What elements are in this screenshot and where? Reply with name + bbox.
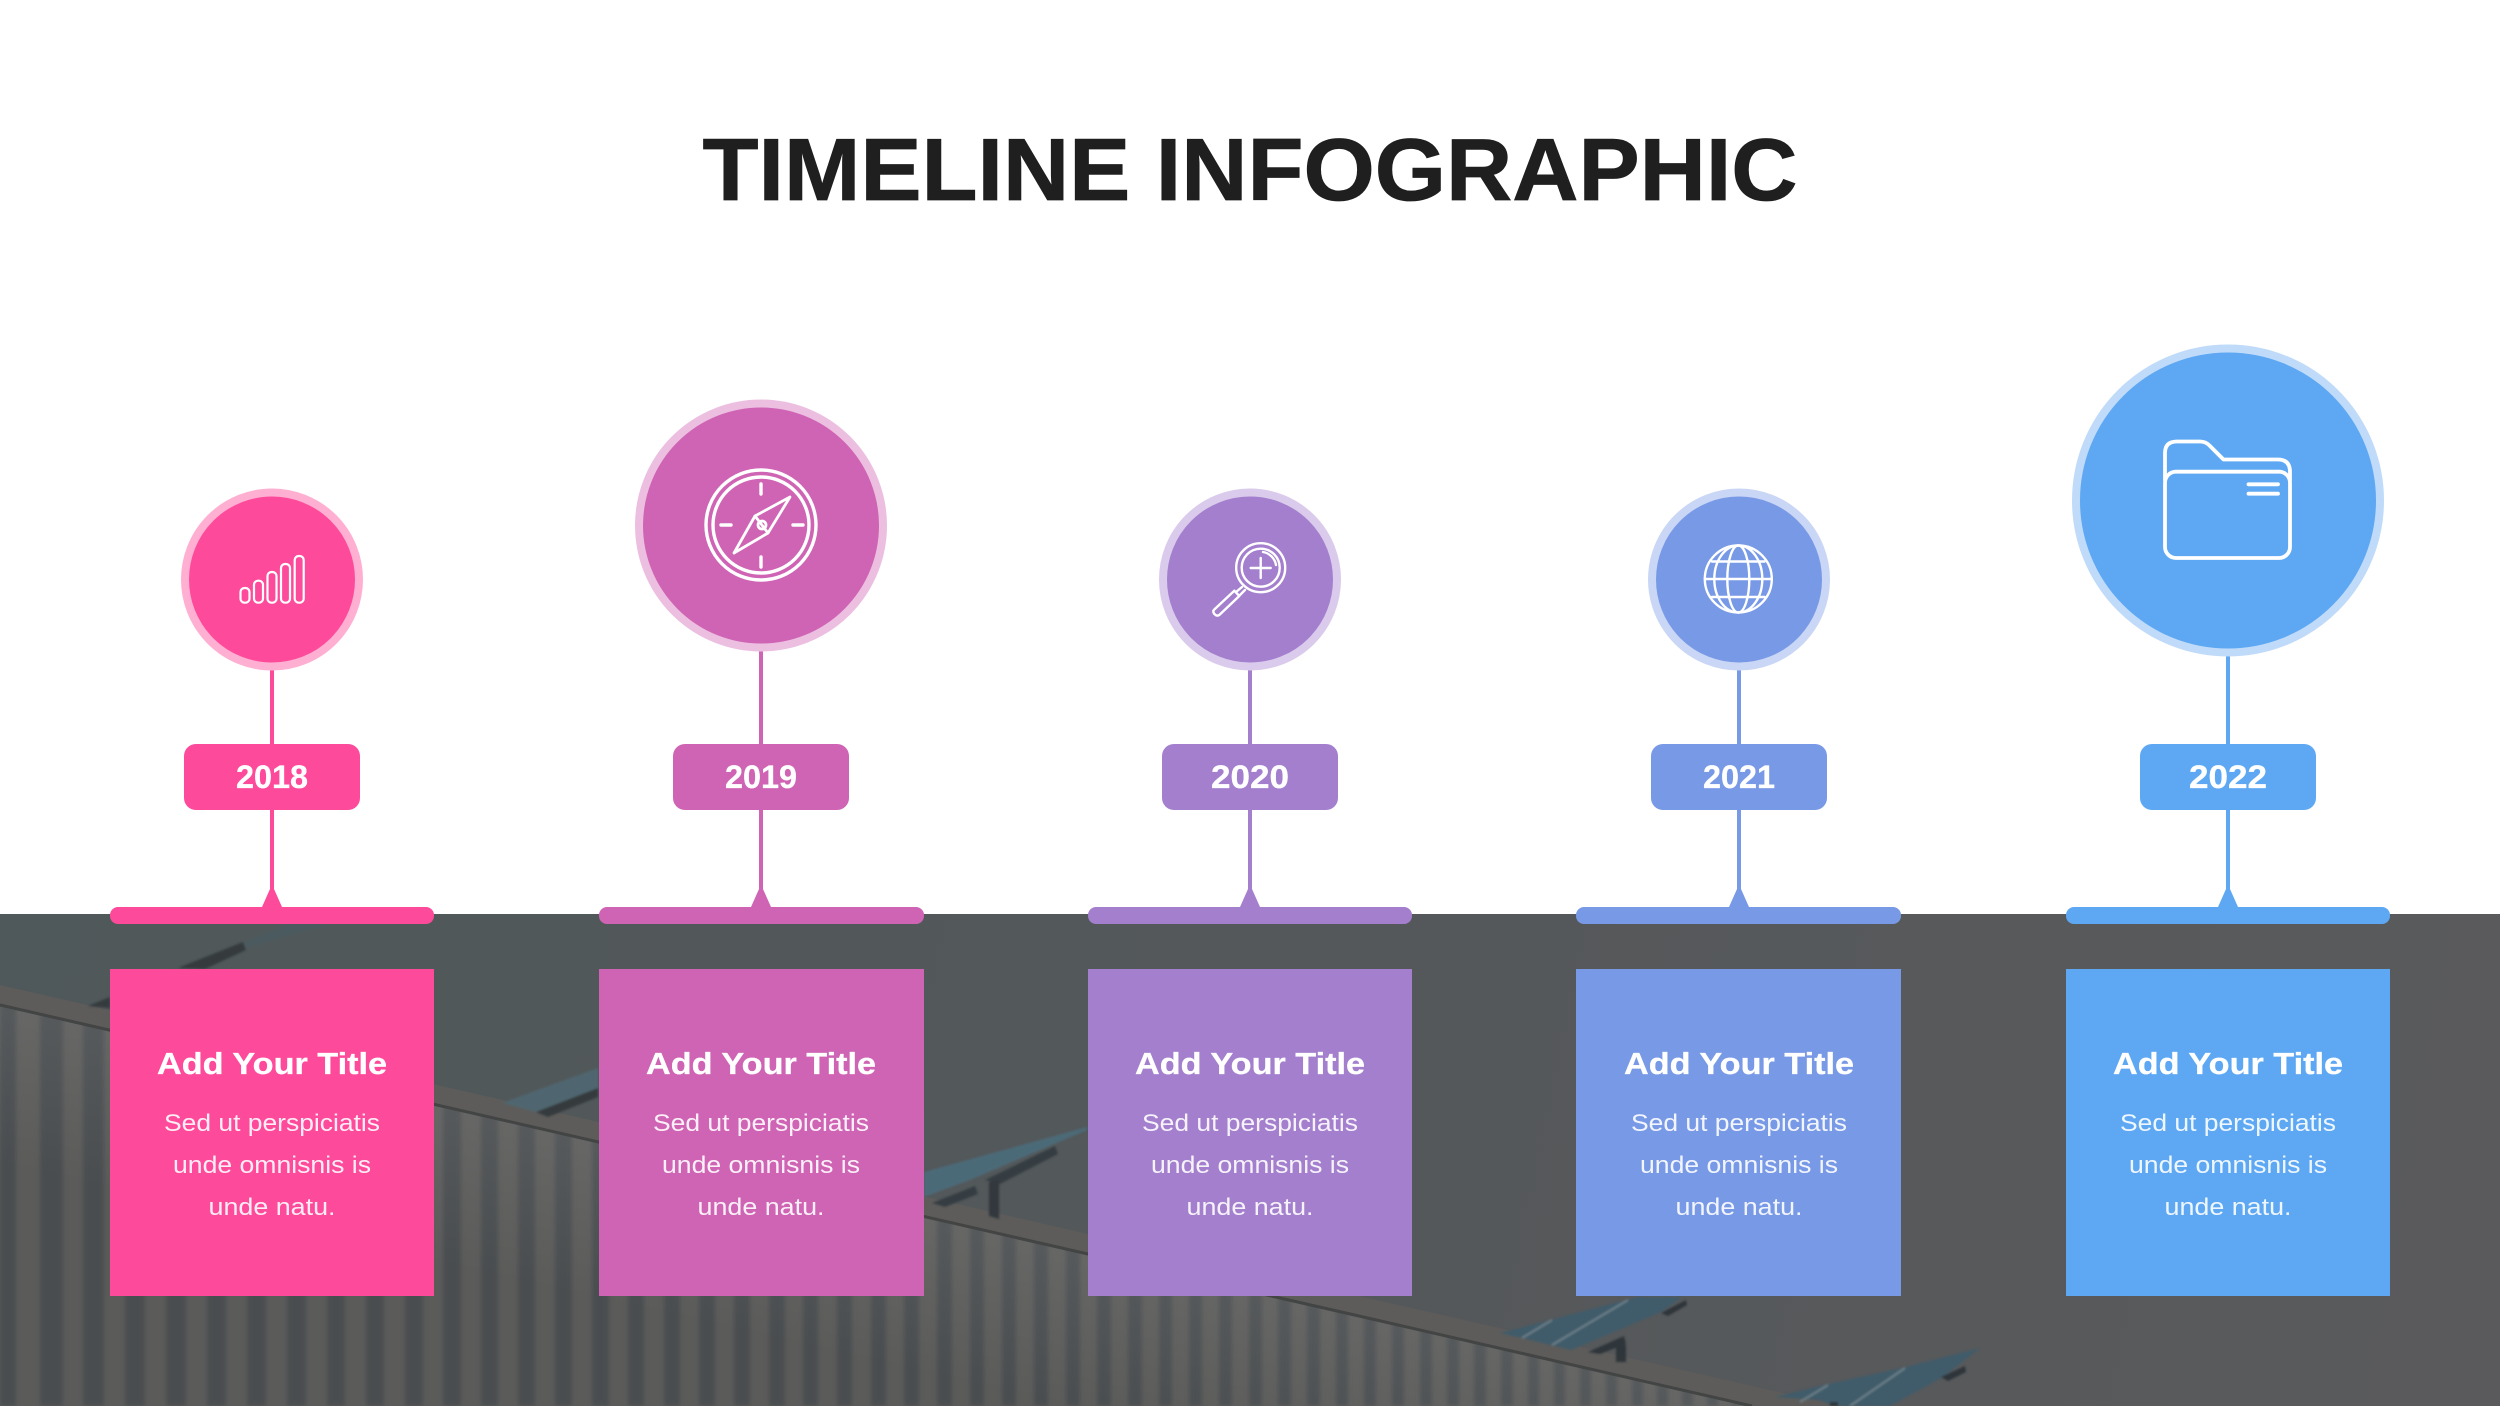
card title 2022: Add Your Title	[2113, 1046, 2343, 1081]
base bar 2022	[2066, 907, 2390, 924]
card text 2018	[164, 1110, 380, 1221]
card text 2020: Sed ut perspiciatis	[1142, 1110, 1358, 1137]
year label 2022: 2022	[2189, 759, 2267, 795]
timeline item: 2019	[599, 404, 924, 1296]
year badge 2018	[184, 744, 360, 810]
year label 2021: 2021	[1703, 759, 1775, 795]
connector stem 2019	[751, 648, 771, 907]
icon: globe	[1705, 546, 1772, 612]
card text 2022	[2120, 1110, 2336, 1221]
timeline item: 2021	[1576, 492, 1901, 1296]
timeline item: 2022	[2066, 348, 2390, 1296]
connector stem 2018	[262, 665, 282, 907]
connector stem 2022	[2218, 653, 2238, 907]
year label 2019: 2019	[725, 759, 797, 795]
card text 2020: unde natu.	[1186, 1194, 1314, 1221]
circle 2019	[639, 404, 883, 648]
year badge 2019	[673, 744, 849, 810]
circle 2021	[1652, 492, 1826, 666]
base bar 2019	[599, 907, 924, 924]
connector stem 2021	[1729, 665, 1749, 907]
base bar 2018	[110, 907, 434, 924]
card 2021	[1576, 969, 1901, 1296]
card text 2019: unde omnisnis is	[662, 1152, 860, 1179]
card 2020	[1088, 969, 1412, 1296]
year label 2020: 2020	[1211, 759, 1289, 795]
card text 2020	[1142, 1110, 1358, 1221]
base bar 2020	[1088, 907, 1412, 924]
timeline item: 2020	[1088, 492, 1412, 1296]
icon: signal bars	[240, 556, 304, 603]
card text 2018: unde natu.	[208, 1194, 336, 1221]
year label 2018: 2018	[236, 759, 308, 795]
card text 2021	[1631, 1110, 1847, 1221]
circle 2018	[185, 492, 359, 666]
card title 2018: Add Your Title	[157, 1046, 387, 1081]
card 2022	[2066, 969, 2390, 1296]
icon: folder	[2165, 442, 2290, 558]
card 2019	[599, 969, 924, 1296]
card text 2022: Sed ut perspiciatis	[2120, 1110, 2336, 1137]
card text 2020: unde omnisnis is	[1151, 1152, 1349, 1179]
connector stem 2020	[1240, 665, 1260, 907]
circle 2022	[2076, 348, 2380, 652]
card title 2019: Add Your Title	[646, 1046, 876, 1081]
title: TIMELINE INFOGRAPHIC	[702, 120, 1798, 219]
dark photo background: rooftop with solar panels	[0, 914, 2500, 1406]
base bar 2021	[1576, 907, 1901, 924]
card text 2021: Sed ut perspiciatis	[1631, 1110, 1847, 1137]
card text 2021: unde omnisnis is	[1640, 1152, 1838, 1179]
year badge 2021	[1651, 744, 1827, 810]
card text 2019: Sed ut perspiciatis	[653, 1110, 869, 1137]
card text 2018: Sed ut perspiciatis	[164, 1110, 380, 1137]
card title 2021: Add Your Title	[1624, 1046, 1854, 1081]
card text 2018: unde omnisnis is	[173, 1152, 371, 1179]
card 2018	[110, 969, 434, 1296]
card text 2019: unde natu.	[698, 1194, 824, 1221]
card text 2019	[653, 1110, 869, 1221]
timeline item: 2018	[110, 492, 434, 1296]
year badge 2022	[2140, 744, 2316, 810]
icon: magnifier	[1213, 543, 1285, 616]
card text 2022: unde natu.	[2164, 1194, 2292, 1221]
year badge 2020	[1162, 744, 1338, 810]
card text 2021: unde natu.	[1676, 1194, 1802, 1221]
card title 2020: Add Your Title	[1135, 1046, 1365, 1081]
card text 2022: unde omnisnis is	[2129, 1152, 2327, 1179]
circle 2020	[1163, 492, 1337, 666]
icon: compass	[706, 470, 816, 580]
